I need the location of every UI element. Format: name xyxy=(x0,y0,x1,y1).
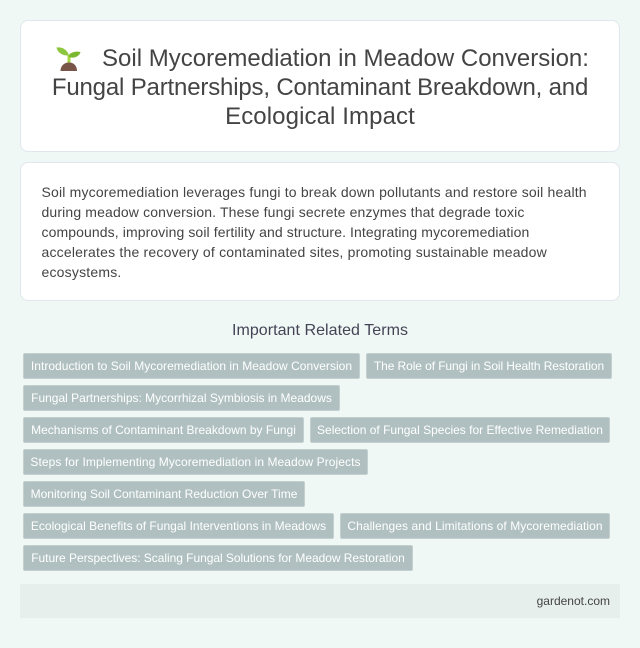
title: Ecological Impact xyxy=(225,103,415,130)
tag xyxy=(23,449,368,475)
tag xyxy=(23,417,304,443)
title xyxy=(52,45,589,130)
tag xyxy=(23,513,334,539)
panel: term tags xyxy=(23,353,612,571)
text block: summary xyxy=(42,184,587,280)
tag: Monitoring Soil Contaminant Reduction Over Time xyxy=(31,487,297,501)
tag xyxy=(23,481,305,507)
text block: summary: ecosystems. xyxy=(42,264,122,280)
panel: title card xyxy=(20,20,620,152)
text block: summary: during meadow conversion. These fungi secrete enzymes that degrade toxic xyxy=(42,204,524,220)
text block: summary: Soil mycoremediation leverages fungi to break down pollutants and restore soil health xyxy=(42,184,587,200)
tag: Challenges and Limitations of Mycoremediation xyxy=(347,519,603,533)
tag: Ecological Benefits of Fungal Interventions in Meadows xyxy=(31,519,326,533)
tag: Future Perspectives: Scaling Fungal Solutions for Meadow Restoration xyxy=(31,551,405,565)
tag: Fungal Partnerships: Mycorrhizal Symbiosis in Meadows xyxy=(31,391,332,405)
text block: summary: accelerates the recovery of contaminated sites, promoting sustainable meadow xyxy=(42,244,547,260)
tag xyxy=(23,545,413,571)
icon: seedling xyxy=(56,47,80,71)
tag: The Role of Fungi in Soil Health Restoration xyxy=(374,359,604,373)
tag: Introduction to Soil Mycoremediation in Meadow Conversion xyxy=(31,359,352,373)
heading: related terms: Important Related Terms xyxy=(232,322,408,339)
text block: summary: compounds, improving soil fertility and structure. Integrating mycoremediation xyxy=(42,224,529,240)
footer source: gardenot.com xyxy=(537,594,610,608)
tag xyxy=(23,385,340,411)
tag: Selection of Fungal Species for Effective Remediation xyxy=(317,423,603,437)
footer bar xyxy=(20,584,620,618)
tag xyxy=(340,513,610,539)
title: Fungal Partnerships, Contaminant Breakdown, and xyxy=(52,74,588,101)
tag xyxy=(310,417,610,443)
panel: intro paragraph xyxy=(20,162,620,301)
tag xyxy=(23,353,360,379)
title: Soil Mycoremediation in Meadow Conversion: xyxy=(102,45,589,72)
tag: Steps for Implementing Mycoremediation in Meadow Projects xyxy=(30,455,361,469)
tag: Mechanisms of Contaminant Breakdown by Fungi xyxy=(31,423,296,437)
tag xyxy=(366,353,612,379)
